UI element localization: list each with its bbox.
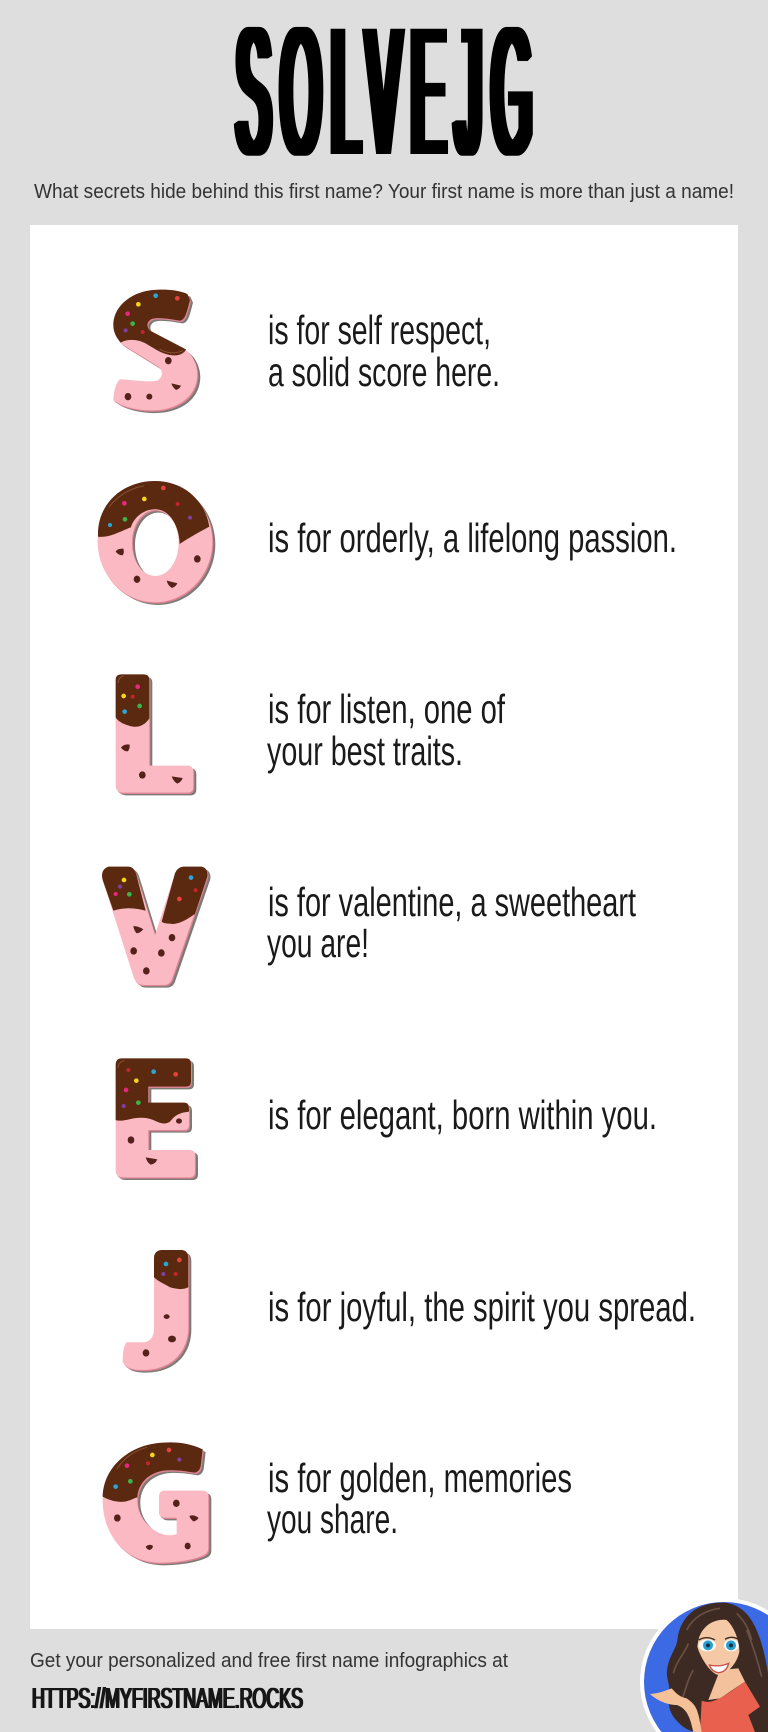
panel: letter meanings card — [30, 225, 738, 1629]
text: V meaning: you are! — [267, 920, 369, 966]
row: E — [116, 1058, 657, 1180]
icon: letter J — [123, 1250, 191, 1373]
row: L — [116, 674, 505, 795]
icon: letter S — [113, 290, 200, 413]
icon: letter G — [103, 1442, 211, 1565]
text: L meaning — [267, 686, 505, 774]
footer url: HTTPS://MYFIRSTNAME.ROCKS — [32, 1683, 303, 1715]
text: G meaning — [267, 1455, 572, 1542]
text: S meaning: a solid score here. — [268, 349, 500, 395]
row: S — [113, 290, 500, 413]
row: O — [98, 481, 677, 605]
icon: letter O — [98, 481, 215, 605]
text: L meaning: is for listen, one of — [268, 686, 505, 732]
text: S meaning: is for self respect, — [268, 307, 491, 353]
text: L meaning: your best traits. — [267, 728, 463, 774]
row: V — [102, 867, 636, 988]
icon: letter E — [116, 1058, 198, 1180]
icon: avatar — [640, 1598, 768, 1732]
row: G — [103, 1442, 572, 1565]
text: V meaning — [267, 879, 636, 966]
subtitle: What secrets hide behind this first name? Your first name is more than just a name! — [34, 181, 734, 203]
footer prompt text: Get your personalized and free first name infographics at — [30, 1650, 508, 1672]
text: G meaning: you share. — [267, 1496, 398, 1542]
icon: letter V — [102, 867, 210, 988]
row: J — [123, 1250, 696, 1373]
text: S meaning — [268, 307, 500, 395]
text: G meaning: is for golden, memories — [268, 1455, 572, 1501]
icon: letter L — [116, 674, 196, 795]
